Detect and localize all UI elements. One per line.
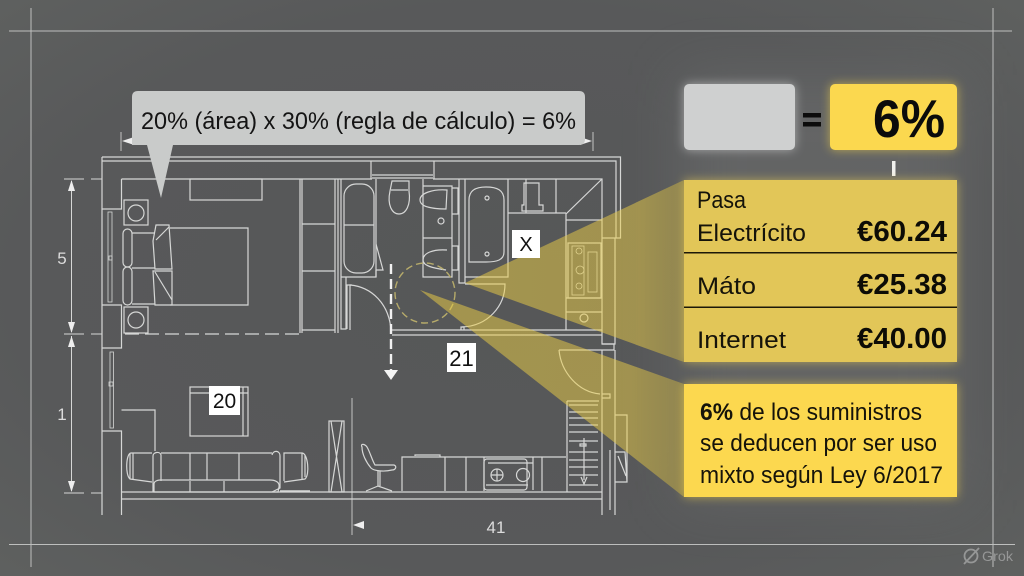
row: mato	[697, 269, 947, 301]
result box: 6%	[830, 84, 957, 150]
watermark: Grok	[982, 548, 1014, 564]
bedroom furniture	[123, 179, 262, 333]
dashed circle	[395, 263, 455, 323]
panel: expenses	[684, 180, 957, 362]
dimension label: 41: 41	[487, 518, 505, 537]
label 20	[209, 386, 240, 415]
entrance door	[559, 350, 627, 482]
dashed arrow	[384, 264, 398, 380]
light beam to expense table	[465, 180, 684, 362]
equals sign	[803, 113, 821, 126]
label X	[512, 230, 540, 258]
sofa and armchairs	[127, 451, 310, 492]
dimension lines	[57, 132, 593, 537]
row: mato: €25.38	[857, 269, 947, 301]
callout: formula	[132, 91, 585, 198]
row: electricity: Pasa	[697, 187, 747, 214]
dimension label: 1: 1	[57, 405, 67, 424]
light beam to note	[420, 290, 684, 497]
row: electricity: Electrícito	[697, 220, 806, 247]
bathroom fixtures	[389, 179, 602, 330]
label 21: 21	[449, 346, 474, 371]
floor plan	[102, 157, 627, 515]
closet and door	[341, 179, 391, 330]
dimension label: 5: 5	[57, 249, 67, 268]
connector tick	[892, 161, 896, 176]
walls	[102, 157, 620, 515]
kitchen	[402, 455, 566, 491]
shelf	[329, 421, 344, 492]
row: electricity	[697, 187, 947, 248]
row: mato: Máto	[697, 273, 756, 300]
wardrobe	[302, 179, 338, 333]
panel: note: se deducen por ser uso	[700, 430, 937, 457]
label 20: 20	[213, 390, 236, 413]
empty grey box	[684, 84, 795, 150]
living room table	[122, 387, 248, 451]
row: electricity: €60.24	[857, 216, 947, 248]
watermark	[964, 548, 1014, 564]
windows	[108, 212, 114, 428]
callout: formula: 20% (área) x 30% (regla de cálculo) = 6%	[141, 108, 576, 135]
panel: note	[684, 384, 957, 497]
row: internet: €40.00	[857, 323, 947, 355]
chair	[362, 444, 396, 491]
result box: 6%: 6%	[873, 90, 945, 149]
stairs	[567, 401, 599, 492]
panel: note: 6% de los suministros	[700, 399, 922, 426]
label X: X	[519, 234, 533, 256]
row: internet: Internet	[697, 327, 786, 354]
row: internet	[697, 323, 947, 355]
panel: note: mixto según Ley 6/2017	[700, 462, 943, 489]
